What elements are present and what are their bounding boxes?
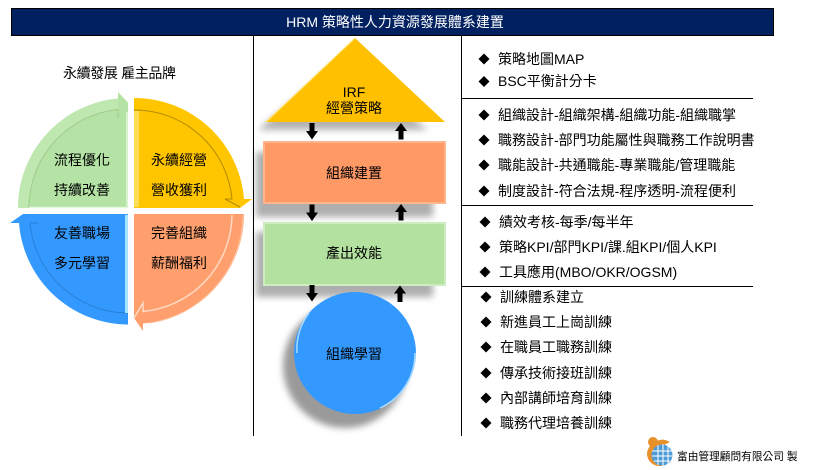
box: output performance: 產出效能 [326,245,382,261]
quadrant: orange compensation: 薪酬福利 [151,255,207,271]
text block: organisation design bullets: 職務設計-部門功能屬性與職務工作說明書 [498,132,755,148]
quadrant: blue friendly workplace: 友善職場 [54,225,110,241]
text block: performance bullets: 績效考核-每季/每半年 [499,214,634,230]
panel: center strategy stack [263,38,446,414]
quadrant: yellow sustainable operation: 永續經營 [151,152,207,168]
credit text: 富由管理顧問有限公司 製 [677,450,798,463]
quadrant: blue friendly workplace [10,214,128,324]
text block: training bullets [480,289,612,431]
heading: cycle title: 永續發展 雇主品牌 [63,65,176,81]
text block: strategy bullets: 策略地圖MAP [498,51,584,67]
quadrant: blue friendly workplace: 多元學習 [54,255,110,271]
triangle: IRF business strategy: IRF [343,84,365,100]
text block: organisation design bullets: 組織設計-組織架構-組織功能-組織職掌 [498,107,736,123]
footer: company logo and credit [647,437,798,466]
text block: strategy bullets: BSC平衡計分卡 [498,73,597,89]
text block: training bullets: 訓練體系建立 [500,289,584,305]
text block: organisation design bullets [478,107,755,199]
text block: training bullets: 內部講師培育訓練 [500,390,612,406]
panel: vertical and horizontal dividers [254,36,753,436]
quadrant: green process optimisation: 流程優化 [54,152,110,168]
box: output performance [263,222,446,286]
text block: training bullets: 職務代理培養訓練 [500,415,612,431]
arrows: between stack levels [306,123,407,302]
quadrant: yellow sustainable operation: 營收獲利 [151,182,207,198]
circle: organisational learning [294,292,416,414]
quadrant: orange compensation: 完善組織 [151,225,207,241]
box: organisation building: 組織建置 [326,165,382,181]
text block: organisation design bullets: 制度設計-符合法規-程序透明-流程便利 [498,183,736,199]
text block: performance bullets: 策略KPI/部門KPI/課.組KPI/個人KPI [499,239,717,255]
title bar: HRM 策略性人力資源發展體系建置 [286,14,504,30]
text block: performance bullets: 工具應用(MBO/OKR/OGSM) [499,264,677,280]
triangle: IRF business strategy [265,38,445,122]
quadrant: green process optimisation [18,92,128,208]
text block: training bullets: 新進員工上崗訓練 [500,314,612,330]
quadrant: orange compensation [134,214,244,331]
text block: training bullets: 在職員工職務訓練 [500,339,612,355]
text block: strategy bullets [478,51,597,89]
box: organisation building [263,141,446,204]
quadrant: yellow sustainable operation [134,98,252,208]
panel: center shape shadows [256,60,433,428]
title bar [12,8,774,36]
text block: training bullets: 傳承技術接班訓練 [500,365,612,381]
panel: sustainable development cycle [10,65,252,331]
quadrant: green process optimisation: 持續改善 [54,182,110,198]
text block: organisation design bullets: 職能設計-共通職能-專業職能/管理職能 [498,157,735,173]
triangle: IRF business strategy: 經營策略 [326,100,382,116]
circle: organisational learning: 組織學習 [326,346,382,362]
icon: company logo [647,437,673,466]
text block: performance bullets [480,214,717,280]
